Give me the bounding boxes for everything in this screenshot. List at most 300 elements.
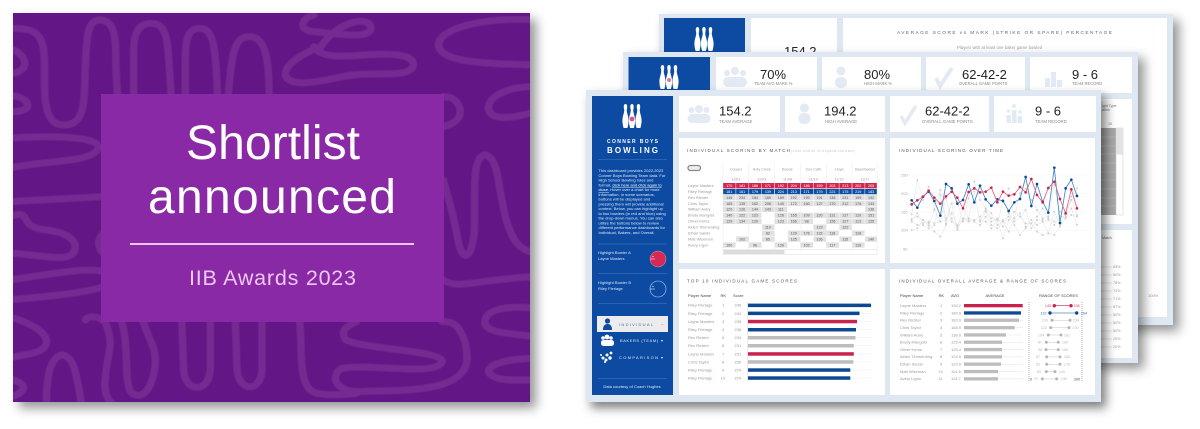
- table values gray: 118: [855, 231, 861, 235]
- table values: 213: [842, 184, 848, 188]
- table values gray: 127: [816, 202, 823, 206]
- rows text: 238: [734, 319, 742, 324]
- table values: 223: [829, 190, 835, 194]
- axis labels: 150: [901, 210, 908, 214]
- rows text: 231: [734, 351, 742, 356]
- rows text: [688, 303, 742, 380]
- table values: [726, 184, 874, 194]
- player names: Layne Masters: [688, 183, 714, 188]
- panel: main dashboard sheet: [586, 90, 1101, 402]
- button: individual: –: [661, 322, 664, 327]
- title box: [101, 94, 444, 322]
- table values gray: 140: [778, 202, 784, 206]
- KPI: team record: [994, 96, 1096, 132]
- rows text: 6: [940, 340, 943, 345]
- table values gray: 85: [766, 237, 770, 241]
- rows text: 230: [734, 359, 742, 364]
- description text: High School Bowling rules and: [598, 178, 653, 183]
- KPI: team average: 154.2: [719, 104, 752, 118]
- table values gray: 96: [753, 243, 757, 247]
- column headers: AVERAGE: [986, 293, 1005, 298]
- table headers: [730, 168, 875, 182]
- range dumbbells: 300: [1074, 378, 1080, 382]
- red bowler line: [912, 179, 1077, 213]
- table values gray: 192: [791, 196, 797, 200]
- table values: 171: [804, 190, 810, 194]
- axis labels: [901, 172, 908, 252]
- rows text: 113.7: [951, 376, 961, 381]
- table values: 205: [868, 184, 874, 188]
- middle sheet content: ight Type: [1102, 104, 1117, 108]
- middle sheet content: HIGH MARK %: [864, 81, 892, 86]
- rows text: Ethan Sands: [900, 362, 923, 366]
- table values gray: 102: [739, 237, 745, 241]
- KPI: high average: HIGH AVERAGE: [825, 119, 857, 124]
- team name: [607, 139, 659, 155]
- data credit: Data courtesy of Coach Hughes: [603, 384, 661, 389]
- middle sheet content: OVERALL GAME POINTS: [959, 81, 1008, 86]
- middle sheet content: 80%: [864, 67, 890, 82]
- table values gray: 144: [752, 208, 758, 212]
- rows text: 3: [722, 319, 725, 324]
- table values gray: 117: [842, 214, 848, 218]
- button: bakers: [601, 335, 663, 346]
- table values gray: 126: [739, 208, 745, 212]
- table title: INDIVIDUAL SCORING BY MATCH: [687, 148, 790, 153]
- table values gray: 180: [765, 196, 771, 200]
- table values: 181: [739, 184, 745, 188]
- table values: 161: [739, 190, 745, 194]
- table values: 213: [791, 190, 797, 194]
- table values: 186: [752, 184, 758, 188]
- table values gray: 129: [791, 231, 797, 235]
- rows text: 3: [940, 318, 943, 323]
- table values gray: 192: [868, 196, 874, 200]
- rows text: Riley Flerlage: [688, 311, 713, 316]
- table values gray: 176: [804, 231, 810, 235]
- middle sheet content: 62-42-2: [962, 67, 1007, 82]
- rows text: [900, 303, 962, 381]
- panel: top 10 individual game scores: [679, 269, 885, 395]
- rows text: 231: [734, 343, 742, 348]
- rows text: Avery Ligon: [900, 376, 921, 381]
- table headers: Boone: [782, 168, 793, 172]
- panel: back dashboard sheet: [659, 14, 1173, 325]
- rows text: Chris Taylor: [688, 359, 710, 364]
- description text: Conner Boys Bowling Team data. For: [598, 173, 666, 178]
- table values gray: 145: [726, 196, 732, 200]
- blue bowler line: [912, 168, 1077, 223]
- description text: buttons will be displayed and: [598, 197, 650, 202]
- range dumbbells: 166: [1062, 348, 1068, 352]
- table values gray: 100: [726, 243, 732, 247]
- rows text: 123.9: [951, 362, 962, 366]
- percent labels: 73%: [1113, 289, 1121, 293]
- table values gray: 131: [829, 214, 835, 218]
- back sheet content: Players with at least one baker game bowled: [957, 45, 1043, 50]
- rows text: 125.4: [951, 347, 962, 352]
- rows text: 243: [734, 311, 742, 316]
- background squiggle pattern: [9, 15, 535, 407]
- table values: 219: [855, 190, 861, 194]
- table values: 139: [765, 190, 771, 194]
- rows text: Layne Masters: [688, 351, 714, 356]
- title text: announced: [148, 171, 396, 224]
- toggle pill: [688, 166, 700, 170]
- table values gray: 136: [868, 208, 874, 212]
- highlight bowler B: Highlight Bowler B: [598, 280, 631, 285]
- table values: 224: [778, 190, 784, 194]
- range dumbbells: 180: [1064, 355, 1070, 359]
- player names: William Autry: [688, 207, 711, 212]
- table values gray: 140: [868, 237, 874, 241]
- description text: different performance dashboards for: [598, 225, 666, 230]
- table values gray: 231: [842, 196, 848, 200]
- panel: individual overall average and range of scores: [890, 269, 1095, 395]
- rows text: Chris Taylor: [900, 325, 922, 330]
- table values gray: 123: [816, 226, 823, 230]
- rows text: 224: [734, 368, 742, 372]
- table values: 179: [752, 190, 758, 194]
- highlight bowler B: Riley Flerlage: [598, 286, 623, 291]
- rows text: 8: [940, 354, 943, 359]
- percent labels: [1113, 265, 1121, 349]
- KPI: team average: [679, 96, 780, 132]
- table values gray: 148: [829, 196, 835, 200]
- rows text: 1: [940, 303, 943, 308]
- rows text: Brody Mangold: [900, 340, 927, 345]
- table values gray: 127: [842, 220, 848, 224]
- column headers: RK: [938, 293, 944, 298]
- table values gray: 169: [778, 196, 784, 200]
- percent labels: 25%: [1113, 337, 1121, 341]
- KPI: team record: TEAM RECORD: [1035, 119, 1067, 124]
- table values gray: 113: [855, 220, 861, 224]
- column headers: RANGE OF SCORES: [1039, 293, 1078, 298]
- button: individual: INDIVIDUAL: [619, 322, 654, 327]
- table values gray: 162: [752, 202, 758, 206]
- rows text: 9: [722, 368, 725, 372]
- title text: [148, 117, 396, 224]
- description text: utilize the buttons below to review: [598, 220, 659, 225]
- percent labels: 71%: [1113, 297, 1121, 301]
- column headers: RK: [720, 293, 726, 298]
- table values gray: 111: [778, 208, 784, 212]
- rows text: 234: [734, 335, 742, 340]
- middle sheet content: 70%: [760, 67, 786, 82]
- player names: Rex Richter: [688, 195, 709, 200]
- column headers: Player Name: [900, 293, 924, 298]
- rows text: 114.6: [951, 369, 961, 374]
- range dumbbells: 98: [1038, 348, 1042, 352]
- table headers: 11/08: [783, 178, 792, 182]
- rows text: 168.9: [951, 325, 962, 330]
- table values gray: 118: [829, 231, 835, 235]
- table values gray: 122: [842, 226, 848, 230]
- table headers: Beechwood: [855, 168, 875, 172]
- table values gray: 119: [765, 226, 771, 230]
- panel: individual scoring over time: [890, 138, 1095, 263]
- KPI: high average: [785, 96, 885, 132]
- table values gray: 165: [726, 202, 732, 206]
- axis labels: 250: [901, 172, 908, 178]
- rows text: Aiden Timmerding: [900, 354, 932, 359]
- range dumbbells: 75: [1033, 377, 1038, 381]
- table scrollbar: [723, 250, 877, 254]
- range dumbbells: 119: [1040, 311, 1047, 315]
- table values gray: 116: [855, 243, 861, 247]
- line chart: [912, 168, 1077, 238]
- rows text: 7: [722, 351, 725, 356]
- range dumbbells: 160: [1062, 341, 1068, 345]
- description text: format, click here and click again to: [598, 182, 662, 187]
- player names: Avery Ligon: [688, 242, 708, 247]
- rows text: Riley Flerlage: [900, 310, 925, 315]
- rows text: Oliver Kerns: [900, 347, 922, 352]
- table values gray: 115: [842, 237, 848, 241]
- percent labels: 67%: [1113, 305, 1121, 309]
- table values gray: 126: [778, 243, 784, 247]
- rows text: 4: [722, 327, 725, 332]
- range dumbbells: 104: [1038, 333, 1044, 337]
- table values gray: 199: [855, 196, 861, 200]
- rows text: 8: [722, 359, 725, 364]
- subtitle: IIB Awards 2023: [189, 266, 356, 290]
- table values gray: 136: [816, 237, 823, 241]
- table headers: Cox Cath: [806, 168, 821, 172]
- range dumbbells: 82: [1036, 362, 1040, 366]
- rows text: Rex Richter: [688, 335, 710, 340]
- middle sheet content: ation: [1102, 108, 1110, 112]
- table headers: 11/10: [809, 178, 818, 182]
- back sheet content: AVERAGE SCORE vs MARK (STRIKE OR SPARE) PERCENTAGE: [897, 30, 1112, 36]
- table values gray: 98: [805, 220, 809, 224]
- panel: individual scoring by match: [679, 138, 885, 263]
- axis labels: 100: [901, 228, 908, 232]
- bars: [748, 304, 871, 380]
- rows text: 5: [722, 335, 725, 340]
- rows text: Matt Wiseman: [900, 369, 926, 374]
- description text: close. Hover over a chart for more: [598, 187, 660, 192]
- range dumbbells: 145: [1045, 304, 1051, 308]
- table values gray: 172: [791, 202, 797, 206]
- rows text: 2: [940, 310, 943, 315]
- button: comparison: ▾: [661, 355, 663, 360]
- range dumbbells: 0: [1030, 378, 1032, 382]
- highlight bowler A: Layne Masters: [598, 256, 625, 261]
- rows text: 9: [940, 362, 943, 366]
- rows text: 183.9: [951, 318, 962, 323]
- table values gray: 102: [804, 243, 810, 247]
- button: comparison: [600, 352, 663, 363]
- rows text: 224: [734, 376, 742, 380]
- table headers: Cooper: [730, 168, 743, 172]
- table values gray: 151: [868, 214, 874, 218]
- middle sheet content: 10: [1108, 122, 1112, 126]
- table values gray: 120: [726, 208, 732, 212]
- table values gray: 120: [752, 220, 758, 224]
- table values gray: 132: [816, 231, 823, 235]
- table values: 203: [829, 184, 835, 188]
- table values gray: 122: [739, 214, 745, 218]
- table values gray: 170: [829, 202, 835, 206]
- axis labels: 200: [901, 191, 908, 196]
- table cell backgrounds: [723, 186, 877, 245]
- range dumbbells: 130: [1042, 319, 1048, 323]
- rows text: 138.0: [951, 332, 962, 337]
- middle sheet content: TEAM RECORD: [1072, 81, 1102, 86]
- table headers: Lloyd: [835, 168, 844, 172]
- rows text: 5: [940, 332, 943, 337]
- middle sheet content: 9 - 6: [1072, 67, 1098, 82]
- percent labels: 50%: [1113, 329, 1121, 333]
- table values: 179: [816, 190, 823, 194]
- table values gray: 212: [842, 202, 848, 206]
- table values gray: 165: [791, 214, 797, 218]
- column headers: [900, 293, 1078, 298]
- middle sheet content: TEAM AVG MARK %: [754, 81, 793, 86]
- panel: shortlist slide: [9, 13, 535, 407]
- table values gray: 191: [816, 196, 823, 200]
- rows text: 126.4: [951, 340, 962, 345]
- table values gray: 160: [804, 202, 810, 206]
- table headers: 11/03: [757, 178, 766, 182]
- player names: Aiden Timmerding: [688, 224, 719, 230]
- highlight bowler A: Highlight Bowler A: [598, 250, 631, 255]
- description text: [598, 168, 666, 235]
- rows text: 11: [938, 376, 943, 381]
- table values gray: 208: [765, 202, 771, 206]
- percent labels: 50%: [1113, 313, 1121, 317]
- table values gray: 125: [791, 237, 797, 241]
- KPI: team record: 9 - 6: [1035, 104, 1061, 118]
- player names: Riley Flerlage: [688, 189, 712, 194]
- panel title: INDIVIDUAL OVERALL AVERAGE & RANGE OF SCORES: [899, 278, 1066, 284]
- description text: This dashboard provides 2022-2023: [598, 168, 664, 173]
- rows text: 6: [722, 343, 725, 348]
- percent labels: 80%: [1113, 273, 1121, 277]
- rows text: 124.9: [951, 354, 962, 359]
- range dumbbells: 230: [1072, 326, 1079, 330]
- rows text: 1: [722, 303, 725, 308]
- range dumbbells: 87: [1036, 355, 1040, 359]
- rows text: 236: [734, 327, 742, 332]
- table values gray: 110: [855, 214, 861, 218]
- KPI: high average: 194.2: [824, 104, 857, 118]
- table values gray: 190: [804, 196, 810, 200]
- panel: middle dashboard sheet: [623, 52, 1138, 363]
- table values: 171: [765, 184, 771, 188]
- table values gray: 120: [816, 214, 823, 218]
- KPI: overall game points: OVERALL GAME POINTS: [922, 119, 973, 124]
- rows text: 7: [940, 347, 943, 352]
- table values gray: [726, 196, 874, 247]
- table values gray: 123: [752, 214, 758, 218]
- description text: information. In some scenarios,: [598, 192, 655, 197]
- range dumbbells: 181: [1064, 333, 1070, 337]
- back sheet content: [664, 18, 1167, 317]
- table values: 175: [842, 190, 848, 194]
- highlight bowler B: [598, 280, 666, 297]
- player names: [688, 183, 719, 247]
- subtitle divider: [130, 243, 414, 245]
- rows text: 10: [938, 369, 944, 374]
- range dumbbells: 176: [1064, 362, 1070, 366]
- description text: Individual, Bakers, and Overall.: [598, 230, 655, 235]
- player names: Brody Mangold: [688, 213, 714, 218]
- rows text: Rex Richter: [688, 343, 710, 348]
- table values gray: 140: [726, 214, 732, 218]
- KPI: overall game points: [890, 96, 989, 132]
- table values gray: 176: [855, 202, 861, 206]
- table values gray: 234: [739, 196, 745, 200]
- button: individual: [597, 316, 668, 332]
- column headers: Score: [733, 293, 744, 298]
- rows text: Riley Flerlage: [688, 368, 713, 372]
- back sheet content: 100%: [1148, 293, 1159, 298]
- table values: 159: [816, 184, 823, 188]
- range dumbbells: 140: [1059, 370, 1065, 374]
- table values gray: 109: [804, 214, 810, 218]
- gray bowler lines: [912, 180, 1077, 238]
- rows text: 194.2: [951, 303, 962, 308]
- percent labels: 85%: [1113, 265, 1121, 269]
- rows text: 10: [720, 376, 726, 380]
- description text: context. Below, you can highlight up: [598, 206, 664, 211]
- table values gray: 134: [739, 220, 745, 224]
- rows text: Rex Richter: [900, 318, 922, 323]
- button: bakers: BAKERS (TEAM): [620, 338, 659, 343]
- percent labels: 78%: [1113, 281, 1121, 285]
- table values: 170: [726, 184, 732, 188]
- table subtitle: (click button to expand/contract): [791, 149, 855, 153]
- table values gray: 129: [726, 220, 732, 224]
- rows text: Riley Flerlage: [688, 327, 713, 332]
- team name: CONNER BOYS: [607, 139, 659, 145]
- table headers: 11/17: [860, 178, 869, 182]
- player names: Oliver Kerns: [688, 219, 709, 224]
- button: bakers: ▾: [661, 338, 663, 343]
- rows text: 248: [734, 303, 742, 308]
- KPI: overall game points: 62-42-2: [925, 104, 970, 118]
- range dumbbells: 264: [1081, 311, 1087, 315]
- percent labels: 50%: [1113, 321, 1121, 325]
- table headers: 11/15: [835, 178, 844, 182]
- table headers: 11/01: [731, 178, 740, 182]
- range dumbbells: 87: [1038, 341, 1042, 345]
- description text: the drop-down menus. You can also: [598, 216, 664, 221]
- table values gray: 135: [739, 202, 745, 206]
- column headers: AVG: [951, 293, 959, 298]
- table values gray: 143: [765, 208, 771, 212]
- range dumbbells: 122: [1041, 326, 1047, 330]
- highlight bowler A: [598, 250, 666, 267]
- table values: 204: [791, 184, 797, 188]
- range dumbbells: 130: [1061, 377, 1067, 381]
- column headers: Player Name: [688, 293, 712, 298]
- rows text: Layne Masters: [900, 303, 926, 308]
- table values: 192: [778, 184, 784, 188]
- tracks: [748, 305, 872, 378]
- percent labels: 20%: [1113, 345, 1121, 349]
- table values gray: 143: [868, 202, 874, 206]
- main sheet content: [592, 96, 1096, 395]
- table values gray: 184: [752, 196, 758, 200]
- player names: Ethan Sands: [688, 230, 710, 235]
- table values gray: 125: [868, 220, 874, 224]
- middle sheet content: Match: [1102, 236, 1112, 240]
- table values gray: 82: [766, 231, 770, 235]
